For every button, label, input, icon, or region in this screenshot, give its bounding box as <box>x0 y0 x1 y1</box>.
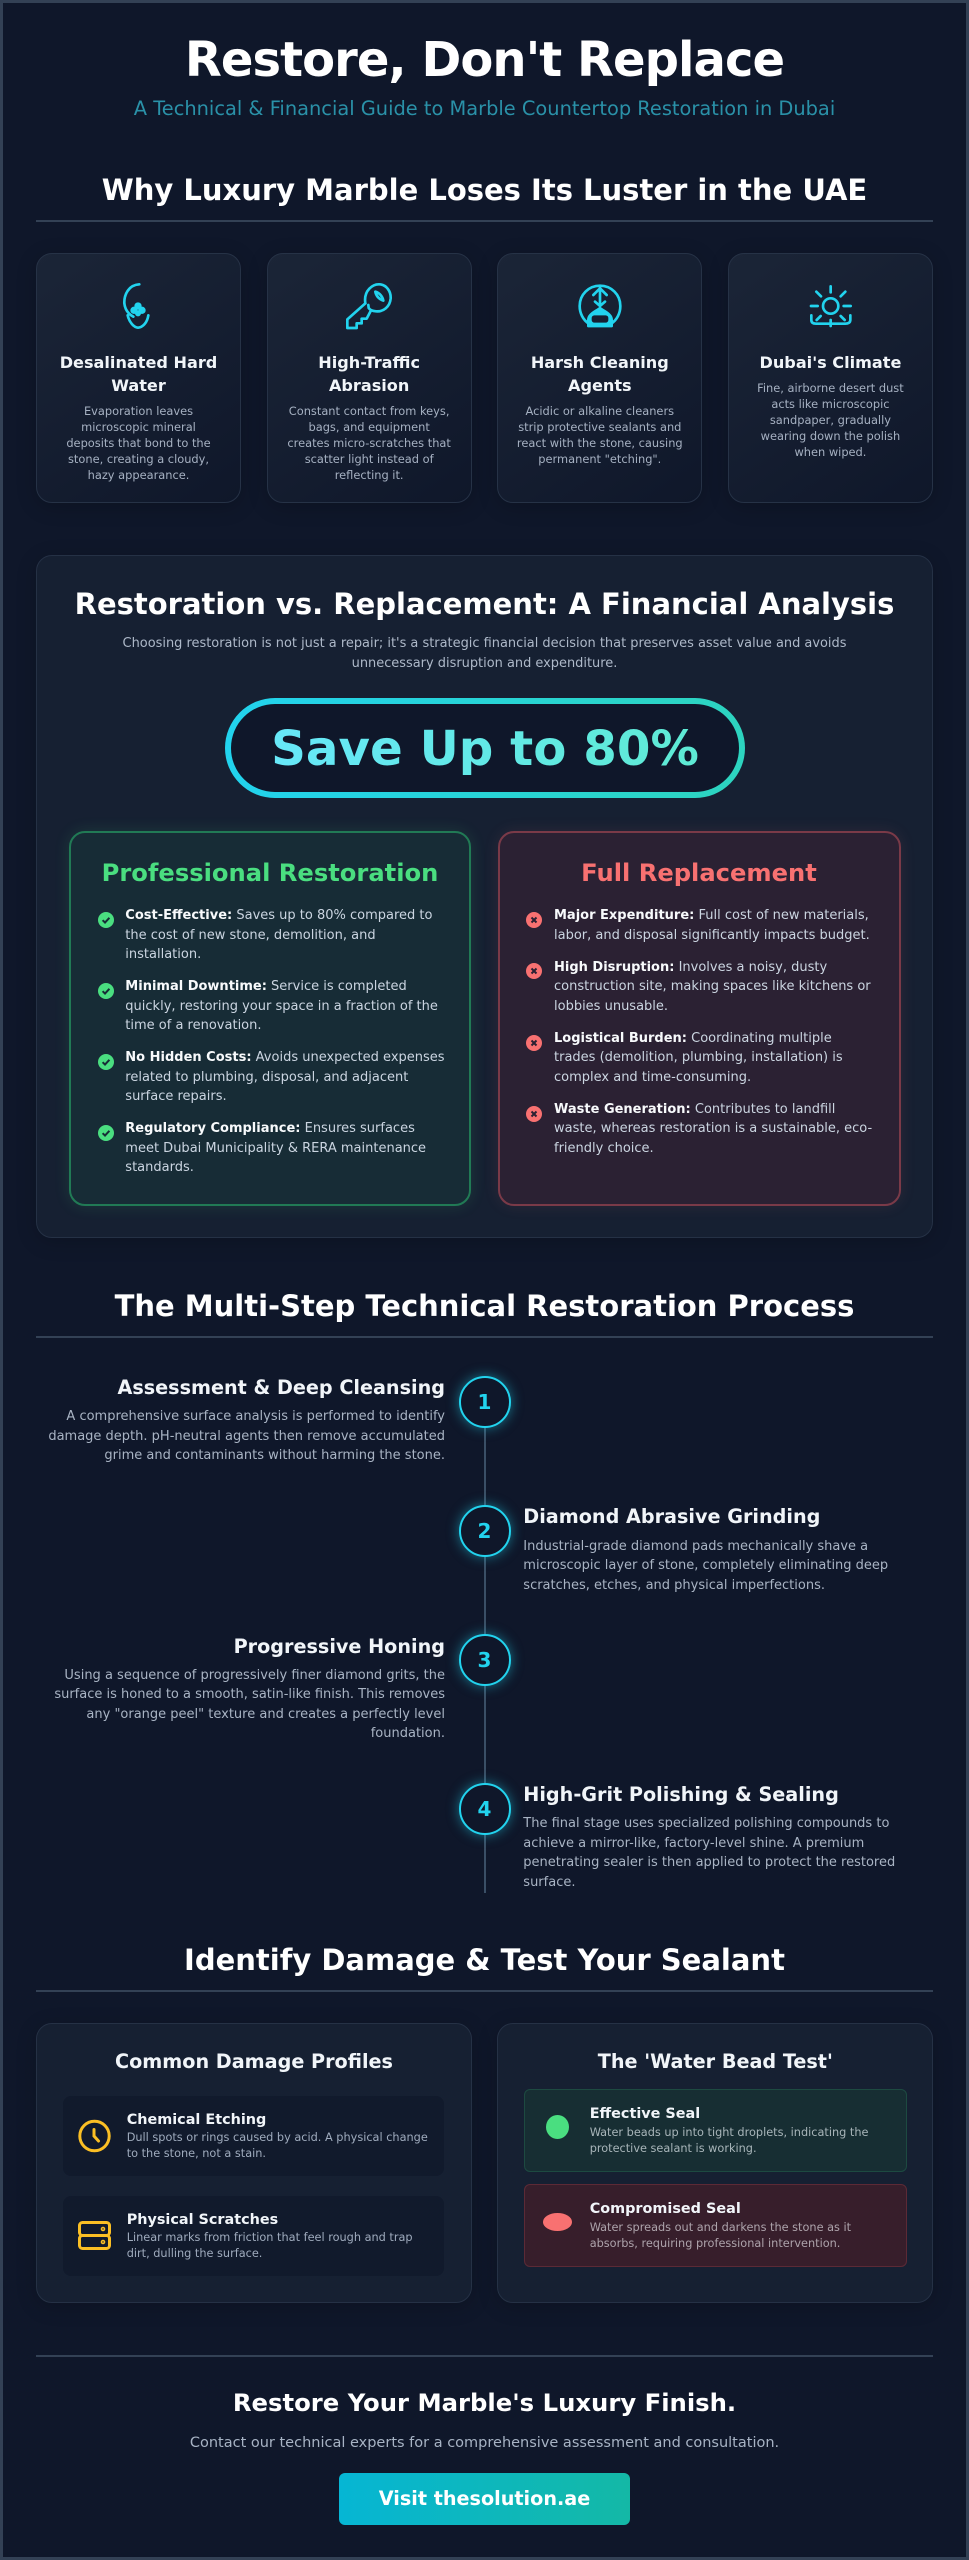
card text: react with the stone, causing <box>517 436 683 450</box>
step 3 text: foundation. <box>371 1726 445 1741</box>
seal text: Water beads up into tight droplets, indicating the <box>590 2126 868 2139</box>
callout: save up to 80%: Save Up to 80% <box>271 721 699 777</box>
heading: why marble loses luster: Why Luxury Marble Loses Its Luster in the UAE <box>102 173 867 207</box>
intro text: unnecessary disruption and expenditure. <box>352 656 617 670</box>
benefit: minimal downtime: time of a renovation. <box>125 1018 262 1033</box>
card title: Dubai's Climate <box>759 353 901 372</box>
step 2 text <box>523 1539 888 1593</box>
damage text: to the stone, not a stain. <box>127 2147 266 2160</box>
benefit: regulatory compliance: meet Dubai Municipality & RERA maintenance <box>125 1141 426 1156</box>
drawback: high disruption: construction site, making spaces like kitchens or <box>554 979 871 994</box>
icon: cross <box>526 912 542 928</box>
drawback: major expenditure: labor, and disposal significantly impacts budget. <box>554 928 870 942</box>
intro text: Choosing restoration is not just a repair; it's a strategic financial decision that preserves asset value and avoids <box>123 636 846 651</box>
damage card: physical scratches <box>63 2196 444 2276</box>
step 1 text: grime and contaminants without harming the stone. <box>104 1448 445 1463</box>
callout: save up to 80% <box>225 698 745 798</box>
icon: check <box>98 983 114 999</box>
step number 3 <box>458 1634 510 1686</box>
step number 4: 4 <box>478 1797 491 1821</box>
benefit: no hidden costs <box>125 1050 445 1104</box>
card text: wearing down the polish <box>761 429 900 443</box>
benefit: minimal downtime: Minimal Downtime: Service is completed <box>125 979 407 994</box>
card text: Fine, airborne desert dust <box>757 381 904 395</box>
subtitle: A Technical & Financial Guide to Marble Countertop Restoration in Dubai <box>134 97 835 120</box>
heading: identify damage: Identify Damage & Test Your Sealant <box>184 1943 785 1977</box>
drawback: waste generation <box>554 1102 872 1156</box>
heading: financial analysis: Restoration vs. Replacement: A Financial Analysis <box>75 587 894 621</box>
step number 2: 2 <box>478 1519 491 1543</box>
icon: check <box>98 1054 114 1070</box>
card text: when wiped. <box>794 445 866 459</box>
seal title: Effective Seal <box>590 2106 700 2122</box>
card text <box>66 404 211 482</box>
button: visit site <box>339 2473 630 2524</box>
step 1 text <box>48 1409 445 1463</box>
button: visit site: Visit thesolution.ae <box>379 2487 590 2510</box>
card text: hazy appearance. <box>88 468 189 482</box>
step 1 title: Assessment & Deep Cleansing <box>117 1376 445 1399</box>
panel heading: Common Damage Profiles <box>115 2050 393 2073</box>
damage title: Physical Scratches <box>127 2212 278 2228</box>
damage text: dirt, dulling the surface. <box>127 2247 262 2260</box>
card text: Acidic or alkaline cleaners <box>526 404 674 418</box>
step 3 text: Using a sequence of progressively finer diamond grits, the <box>64 1668 445 1683</box>
icon: cross <box>526 1035 542 1051</box>
step 3 text: any "orange peel" texture and creates a perfectly level <box>86 1707 445 1722</box>
step 1 text: A comprehensive surface analysis is performed to identify <box>66 1409 445 1424</box>
card text: microscopic mineral <box>81 420 196 434</box>
benefit: no hidden costs: related to plumbing, disposal, and adjacent <box>125 1070 408 1084</box>
card text: stone, creating a cloudy, <box>68 452 209 466</box>
card title: Desalinated Hard <box>60 353 217 372</box>
icon: server <box>78 2221 111 2250</box>
step number 2 <box>458 1505 510 1557</box>
title: Restore, Don't Replace <box>185 32 784 88</box>
damage card: chemical etching <box>63 2096 444 2176</box>
benefit: cost-effective: Cost-Effective: Saves up to 80% compared to <box>125 908 432 923</box>
benefit: no hidden costs: No Hidden Costs: Avoids unexpected expenses <box>125 1050 445 1065</box>
seal card: compromised <box>524 2184 907 2267</box>
seal text <box>590 2126 868 2155</box>
step 2 text: microscopic layer of stone, completely eliminating deep <box>523 1558 888 1573</box>
drawback: major expenditure <box>554 908 870 942</box>
icon: cross <box>526 1106 542 1122</box>
card text <box>757 381 904 459</box>
heading: full replacement: Full Replacement <box>581 859 817 887</box>
card text: sandpaper, gradually <box>770 413 891 427</box>
card text: reflecting it. <box>335 468 404 482</box>
benefit: no hidden costs: surface repairs. <box>125 1089 227 1104</box>
card title: Agents <box>568 376 632 395</box>
icon: sun and dust <box>810 285 852 328</box>
step 3 text: surface is honed to a smooth, satin-like finish. This removes <box>54 1687 445 1702</box>
panel: high-traffic abrasion <box>267 253 472 503</box>
panel: common damage profiles <box>36 2023 472 2303</box>
card title <box>318 353 420 395</box>
benefit: cost-effective: the cost of new stone, demolition, and <box>125 928 376 942</box>
drawback: waste generation: Waste Generation: Contributes to landfill <box>554 1102 835 1117</box>
damage text <box>127 2131 428 2160</box>
icon: check <box>98 912 114 928</box>
card text <box>287 404 451 482</box>
card text: Evaporation leaves <box>84 404 193 418</box>
step 4 text <box>523 1816 895 1890</box>
seal text <box>590 2221 851 2250</box>
benefit: minimal downtime <box>125 979 438 1033</box>
step 2 text: Industrial-grade diamond pads mechanically shave a <box>523 1539 868 1554</box>
benefit: minimal downtime: quickly, restoring your space in a fraction of the <box>125 998 438 1014</box>
seal text: Water spreads out and darkens the stone as it <box>590 2221 851 2234</box>
drawback: major expenditure: Major Expenditure: Full cost of new materials, <box>554 908 869 923</box>
drawback: logistical burden: Logistical Burden: Coordinating multiple <box>554 1031 832 1046</box>
step 4 text: penetrating sealer is then applied to protect the restored <box>523 1855 895 1870</box>
step 2 title: Diamond Abrasive Grinding <box>523 1505 820 1528</box>
step 2 text: scratches, etches, and physical imperfections. <box>523 1578 825 1593</box>
seal text: absorbs, requiring professional intervention. <box>590 2237 840 2250</box>
card title <box>531 353 669 395</box>
damage text: Linear marks from friction that feel rough and trap <box>127 2231 413 2244</box>
step number 1: 1 <box>478 1390 491 1414</box>
card text: permanent "etching". <box>538 452 661 466</box>
step 4 text: surface. <box>523 1875 575 1890</box>
card title: Abrasion <box>329 376 409 395</box>
icon: check <box>98 1125 114 1141</box>
step number 1 <box>458 1376 510 1428</box>
damage text <box>127 2231 413 2260</box>
drawback: logistical burden: trades (demolition, plumbing, installation) is <box>554 1050 843 1065</box>
heading: professional restoration: Professional Restoration <box>102 859 438 887</box>
seal text: protective sealant is working. <box>590 2142 757 2155</box>
card text: Constant contact from keys, <box>289 404 449 418</box>
card text <box>517 404 683 466</box>
panel: full replacement <box>498 831 900 1206</box>
panel: financial analysis <box>36 555 933 1238</box>
panel heading: The 'Water Bead Test' <box>598 2050 833 2073</box>
footer text: Contact our technical experts for a comprehensive assessment and consultation. <box>190 2435 779 2451</box>
footer heading: Restore Your Marble's Luxury Finish. <box>233 2388 736 2417</box>
heading: technical process: The Multi-Step Technical Restoration Process <box>115 1289 854 1323</box>
card title: High-Traffic <box>318 353 420 372</box>
panel: desalinated hard water <box>36 253 241 503</box>
card title <box>60 353 217 395</box>
card text: acts like microscopic <box>771 397 890 411</box>
icon: flat water <box>542 2213 572 2231</box>
step number 3: 3 <box>478 1648 491 1672</box>
drawback: high disruption: High Disruption: Involves a noisy, dusty <box>554 960 827 975</box>
benefit: regulatory compliance <box>125 1121 426 1175</box>
panel: professional restoration <box>69 831 471 1206</box>
step 1 text: damage depth. pH-neutral agents then remove accumulated <box>48 1429 445 1444</box>
icon: water bead <box>546 2115 568 2139</box>
seal card: effective <box>524 2089 907 2172</box>
icon: key <box>346 283 392 330</box>
icon: cross <box>526 963 542 979</box>
step 3 title: Progressive Honing <box>234 1635 445 1658</box>
drawback: logistical burden: complex and time-consuming. <box>554 1070 751 1085</box>
seal title: Compromised Seal <box>590 2201 741 2217</box>
step number 4 <box>458 1783 510 1835</box>
step 4 text: The final stage uses specialized polishing compounds to <box>523 1816 889 1831</box>
icon: cleaning agent <box>578 284 622 328</box>
benefit: regulatory compliance: Regulatory Compliance: Ensures surfaces <box>125 1121 415 1136</box>
drawback: waste generation: waste, whereas restoration is a sustainable, eco- <box>554 1121 872 1136</box>
card text: strip protective sealants and <box>518 420 681 434</box>
damage title: Chemical Etching <box>127 2112 266 2128</box>
card text: creates micro-scratches that <box>287 436 451 450</box>
step 4 text: achieve a mirror-like, factory-level shine. A premium <box>523 1836 864 1851</box>
icon: water drop <box>123 283 150 329</box>
panel: water bead test <box>497 2023 933 2303</box>
step 3 text <box>54 1668 445 1741</box>
card text: scatter light instead of <box>305 452 434 466</box>
card text: deposits that bond to the <box>66 436 211 450</box>
panel: harsh cleaning agents <box>497 253 702 503</box>
panel: dubai's climate <box>728 253 933 503</box>
intro text <box>123 636 846 670</box>
card text: bags, and equipment <box>308 420 430 434</box>
benefit: cost-effective <box>125 908 432 962</box>
card title: Harsh Cleaning <box>531 353 669 372</box>
damage text: Dull spots or rings caused by acid. A physical change <box>127 2131 428 2144</box>
step 4 title: High-Grit Polishing & Sealing <box>523 1783 839 1806</box>
benefit: cost-effective: installation. <box>125 947 201 962</box>
card title: Water <box>111 376 166 395</box>
drawback: high disruption: lobbies unusable. <box>554 999 668 1014</box>
drawback: waste generation: friendly choice. <box>554 1141 654 1156</box>
icon: clock <box>78 2120 111 2152</box>
drawback: high disruption <box>554 960 871 1014</box>
benefit: regulatory compliance: standards. <box>125 1160 194 1175</box>
drawback: logistical burden <box>554 1031 843 1085</box>
timeline line <box>484 1402 486 1893</box>
